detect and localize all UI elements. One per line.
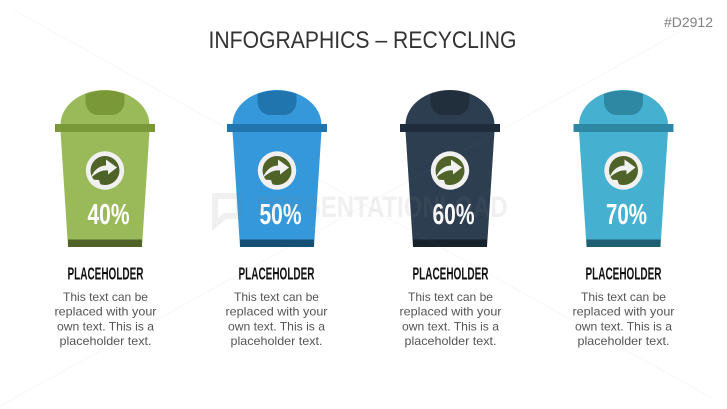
bin knob [258,90,296,115]
bin: blue 50% [227,90,327,247]
percentage: 40% [88,199,130,231]
percentage: 50% [260,199,302,231]
body text [572,290,674,348]
heading: PLACEHOLDER [412,263,489,283]
bin dome [406,90,494,125]
recycling icon [431,151,469,190]
recycling icon [86,151,124,190]
title: INFOGRAPHICS – RECYCLING [208,27,516,54]
body text: own text. This is a [57,319,154,333]
body text: placeholder text. [230,334,322,348]
caption 2 [226,263,328,348]
bin: green 40% [55,90,155,247]
bin body [232,131,322,247]
bin rim [574,124,674,132]
bin dome [579,90,668,125]
body text: own text. This is a [575,319,672,333]
bin body [579,131,668,247]
heading: PLACEHOLDER [586,263,662,283]
bin: navy 60% [400,90,500,247]
percentage: 60% [432,199,474,231]
caption 4 [572,263,674,348]
watermark: PRESENTATIONLOAD [256,191,508,224]
bin dome [60,90,150,125]
bin body [60,131,150,247]
body text: This text can be [408,290,493,304]
bin knob [430,90,470,115]
bin base [586,240,660,247]
recycling icon [258,151,296,190]
body text: replaced with your [226,305,328,319]
body text: This text can be [234,290,319,304]
percentage: 70% [606,199,647,231]
bin dome [232,90,322,125]
body text: own text. This is a [228,319,325,333]
body text: replaced with your [400,305,502,319]
bin body [406,131,494,247]
heading: PLACEHOLDER [68,263,144,283]
heading: PLACEHOLDER [238,263,315,283]
body text [54,290,156,348]
caption 1 [54,263,156,348]
body text: replaced with your [54,305,156,319]
body text: replaced with your [572,305,674,319]
body text: own text. This is a [402,319,499,333]
product code: #D2912 [664,15,713,30]
body text: This text can be [63,290,148,304]
bin base [413,240,487,247]
bin knob [86,90,124,115]
bin base [240,240,314,247]
recycling icon [604,151,643,190]
caption 3 [400,263,502,348]
body text: placeholder text. [404,334,496,348]
bin base [68,240,142,247]
bin rim [227,124,327,132]
bin knob [604,90,643,115]
body text: placeholder text. [60,334,152,348]
bin rim [55,124,155,132]
bin: teal 70% [574,90,674,247]
bin rim [400,124,500,132]
body text: This text can be [581,290,666,304]
watermark [212,191,508,231]
body text [226,290,328,348]
body text: placeholder text. [578,334,670,348]
body text [400,290,502,348]
